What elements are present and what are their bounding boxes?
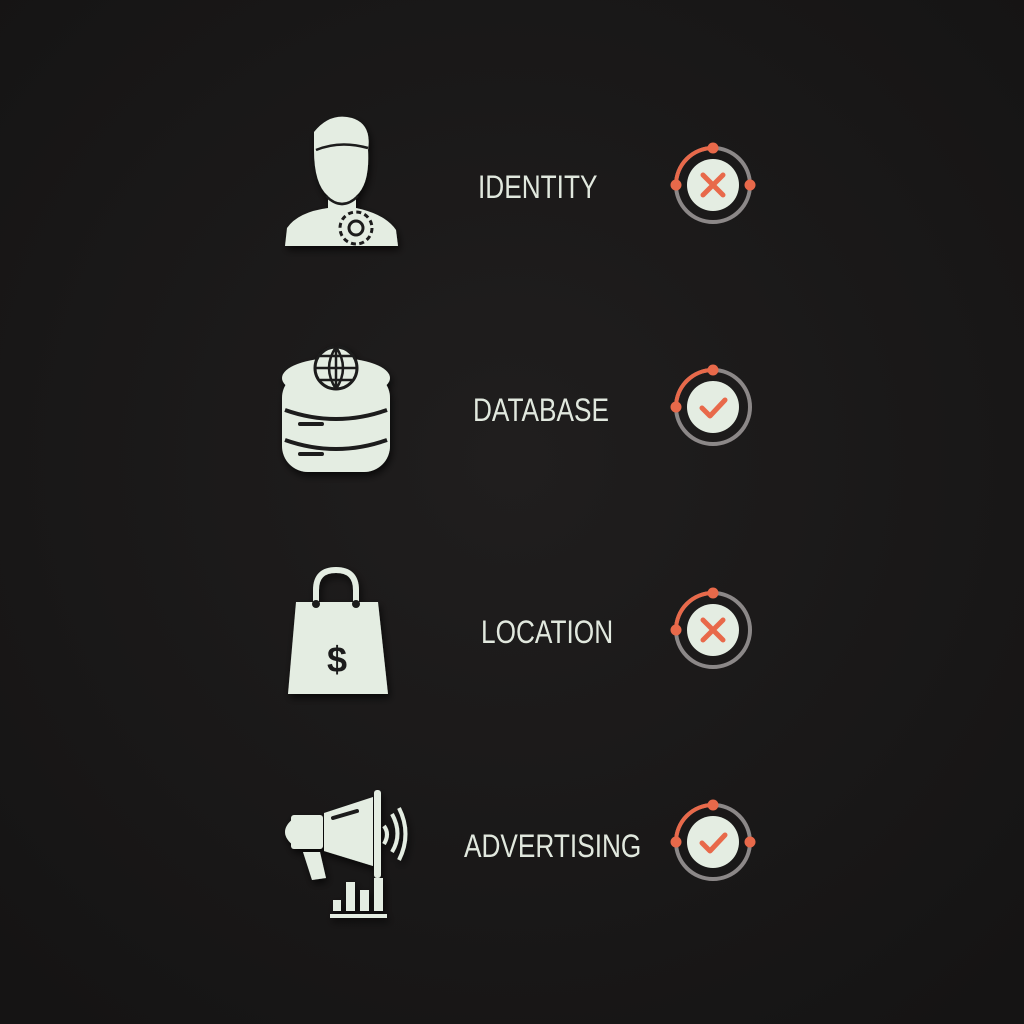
label: location: LOCATION xyxy=(481,616,613,651)
icon: shopping bag with dollar xyxy=(288,570,388,694)
status: location cross xyxy=(670,588,750,667)
icon: shopping bag with dollar: $ xyxy=(327,639,347,680)
status: advertising check xyxy=(670,800,756,879)
label: database: DATABASE xyxy=(473,394,609,429)
label: identity: IDENTITY xyxy=(478,171,598,206)
status: database check xyxy=(670,364,750,444)
status: identity cross xyxy=(670,142,756,222)
label: advertising: ADVERTISING xyxy=(464,830,641,865)
icon: database with globe xyxy=(282,347,390,472)
icon: megaphone with bar chart xyxy=(285,790,406,918)
icon: identity person with gear xyxy=(285,117,398,246)
